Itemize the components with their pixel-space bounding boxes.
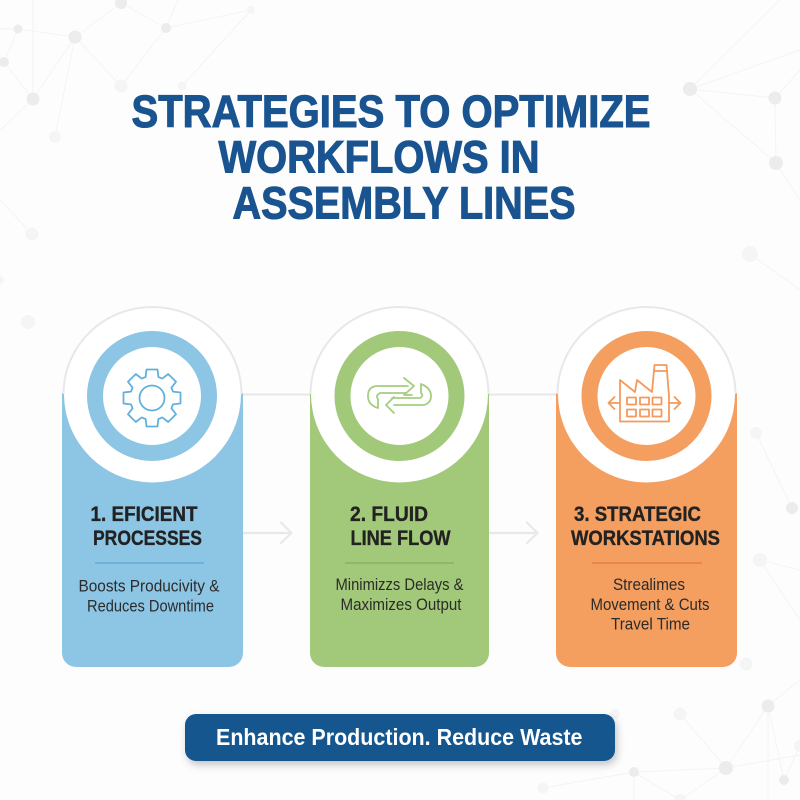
circle badge: [310, 306, 488, 482]
description: [590, 576, 710, 634]
divider: [95, 562, 204, 564]
icon: factory: [608, 365, 680, 422]
card background: [310, 393, 489, 667]
description: Reduces Downtime: [87, 598, 214, 616]
circle badge: [64, 306, 242, 482]
circle badge: [558, 306, 736, 482]
title: ASSEMBLY LINES: [232, 178, 576, 228]
heading: [90, 502, 202, 550]
card background: [62, 393, 243, 667]
heading: 3. STRATEGIC: [574, 502, 701, 526]
icon: gear: [124, 370, 180, 426]
description: Movement & Cuts: [590, 596, 710, 614]
description: [336, 576, 464, 614]
heading: LINE FLOW: [350, 526, 451, 550]
description: Boosts Producivity &: [78, 578, 220, 596]
divider: [345, 562, 454, 564]
card background: [556, 393, 737, 667]
heading: [571, 502, 720, 550]
panel: strategic workstations: [556, 306, 737, 667]
heading: [350, 502, 451, 550]
description: [78, 578, 220, 616]
callout: tagline banner: Enhance Production. Reduce Waste: [216, 724, 582, 750]
callout: tagline banner: [185, 714, 615, 761]
description: Strealimes: [613, 576, 685, 594]
heading: 1. EFICIENT: [90, 502, 198, 526]
title: STRATEGIES TO OPTIMIZE: [132, 86, 650, 137]
divider: [592, 562, 702, 564]
title: [132, 86, 650, 228]
arrow: card 1 to card 2: [243, 522, 292, 543]
description: Travel Time: [611, 616, 690, 634]
description: Maximizes Output: [340, 596, 462, 614]
panel: efficient processes: [62, 306, 243, 667]
panel: fluid line flow: [310, 306, 489, 667]
title: WORKFLOWS IN: [218, 132, 540, 182]
heading: 2. FLUID: [350, 502, 428, 526]
connector lines between circles: [240, 394, 559, 396]
description: Minimizzs Delays &: [336, 576, 464, 594]
arrow: card 2 to card 3: [489, 522, 538, 543]
heading: WORKSTATIONS: [571, 526, 720, 550]
heading: PROCESSES: [93, 526, 202, 550]
icon: flow arrows: [368, 378, 431, 413]
